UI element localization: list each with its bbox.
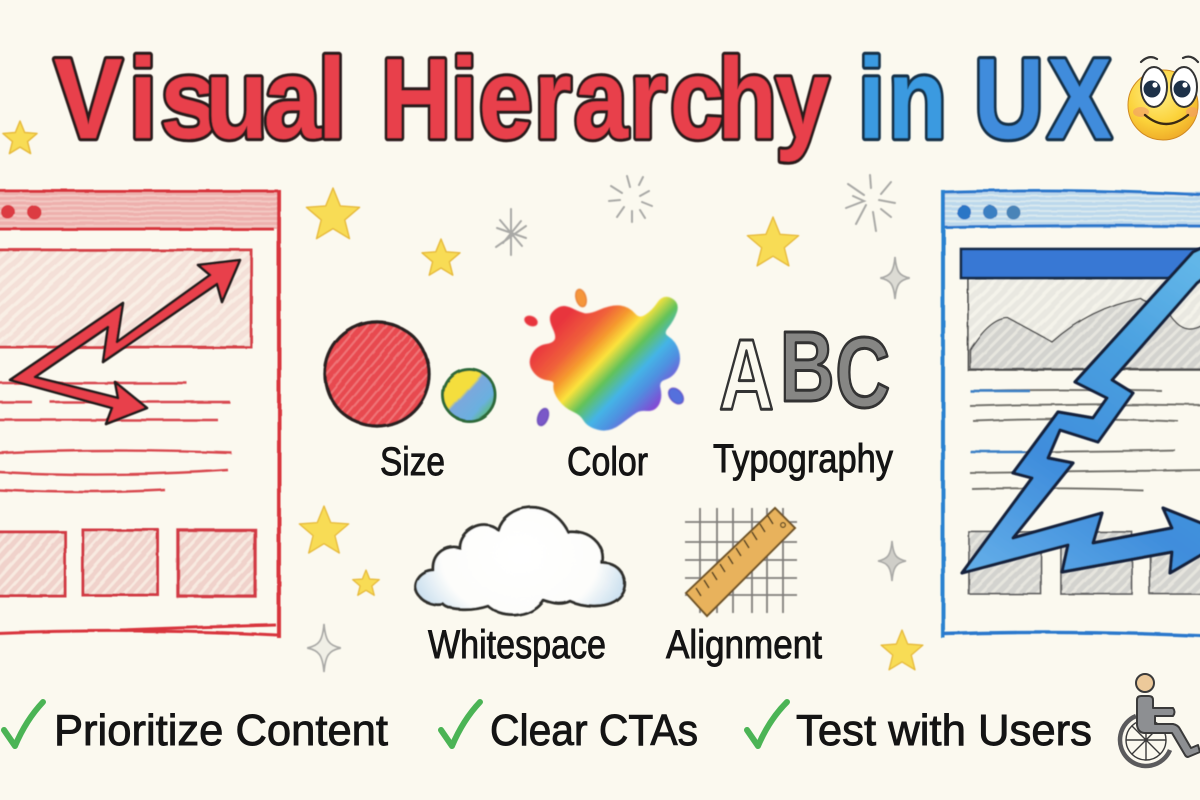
content boxes	[0, 532, 65, 596]
label: Typography: Typography	[713, 437, 893, 481]
checklist item: Prioritize Content: Prioritize Content	[54, 706, 388, 755]
title: Hierarchy	[381, 36, 829, 163]
browser header bar	[0, 190, 278, 229]
label: Alignment: Alignment	[666, 623, 822, 667]
arrow: red reading path	[10, 260, 240, 424]
arrow: blue Z pattern	[962, 246, 1200, 573]
icon: smiling emoji	[1128, 57, 1198, 140]
header band	[961, 249, 1200, 278]
decorative stars	[3, 121, 923, 670]
text lines	[0, 383, 232, 492]
checklist item: Clear CTAs: Clear CTAs	[490, 706, 698, 755]
title: UX	[974, 36, 1112, 163]
checklist item: Test with Users: Test with Users	[796, 706, 1092, 755]
icon: rainbow color splat	[523, 288, 686, 428]
browser header bar	[944, 192, 1200, 228]
decorative sparkles	[307, 175, 910, 672]
icon: ABC typography letters: B	[780, 311, 835, 422]
title: Visual	[54, 35, 346, 162]
icon: size circles	[325, 322, 495, 426]
label: Color: Color	[567, 440, 648, 484]
content boxes	[969, 532, 1041, 594]
label: Whitespace: Whitespace	[428, 623, 606, 667]
icon: ABC typography letters: C	[835, 317, 890, 428]
panel: blue wireframe with Z pattern arrow	[942, 190, 1200, 638]
title: in	[858, 36, 947, 163]
hero box	[0, 250, 251, 347]
panel: red wireframe with Z pattern broken arrow	[0, 190, 279, 638]
title	[54, 35, 1112, 163]
text lines	[970, 390, 1200, 490]
icon: ABC typography letters: A	[719, 319, 774, 430]
icon: whitespace cloud	[415, 507, 625, 615]
hero image	[968, 278, 1200, 370]
icon: wheelchair accessibility	[1120, 674, 1200, 766]
icon: grid and ruler	[685, 508, 797, 616]
label: Size: Size	[380, 440, 445, 484]
